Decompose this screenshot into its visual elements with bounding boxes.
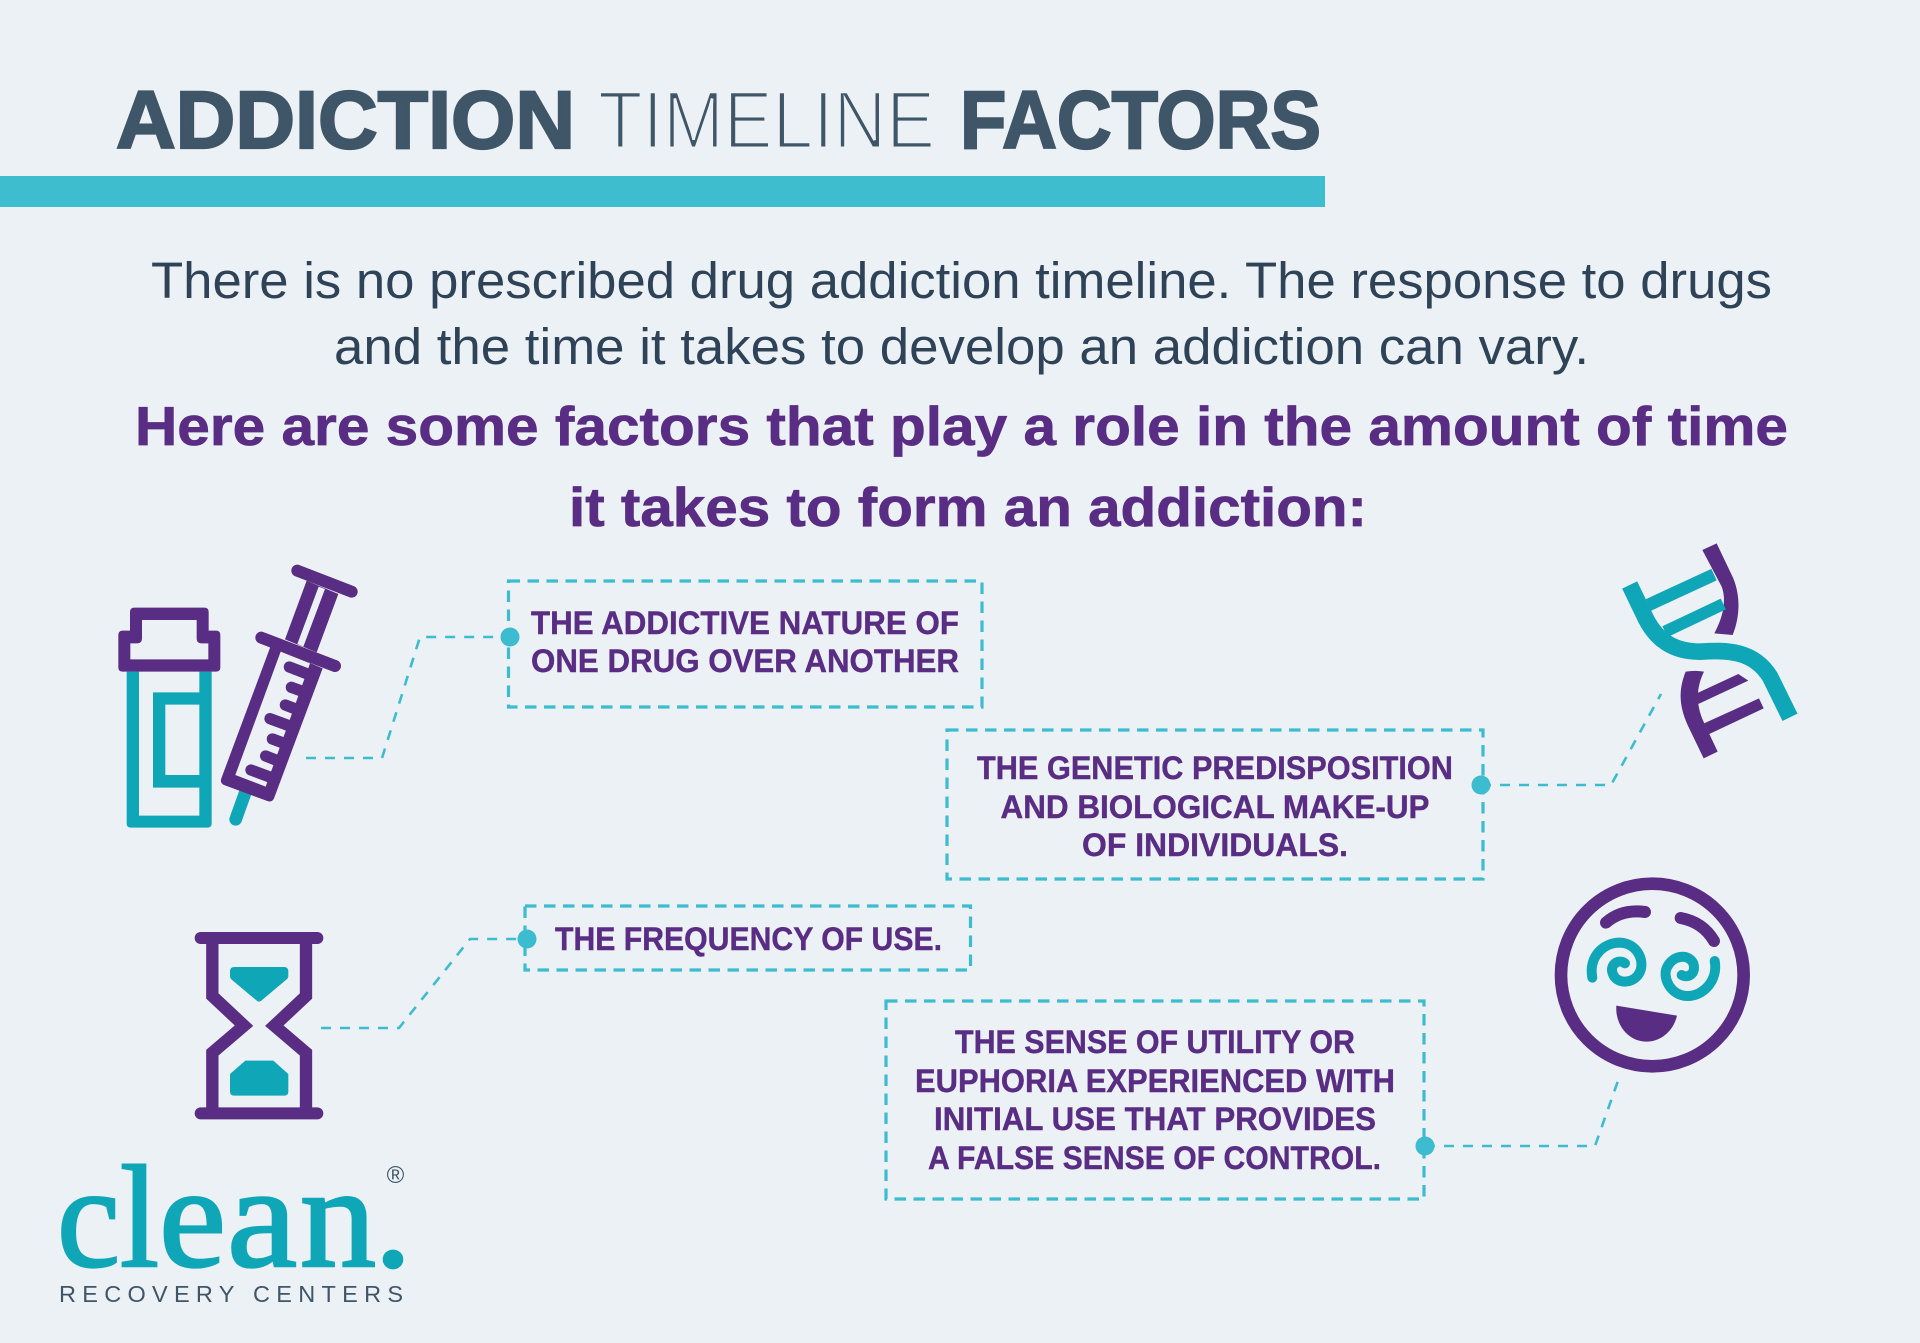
logo — [57, 1136, 412, 1307]
box: sense of utility: A FALSE SENSE OF CONTROL. — [928, 1140, 1381, 1176]
connector: frequency — [321, 939, 527, 1028]
box: frequency of use — [518, 906, 970, 970]
logo: . — [374, 1136, 412, 1298]
title — [116, 75, 1321, 166]
title: ADDICTION — [116, 75, 575, 166]
logo: RECOVERY CENTERS — [59, 1281, 403, 1307]
icon: dna helix — [1630, 543, 1790, 758]
box: genetic predisposition: THE GENETIC PREDISPOSITION — [977, 750, 1453, 786]
connector: drug — [306, 637, 510, 758]
box: sense of utility: THE SENSE OF UTILITY OR — [955, 1024, 1355, 1060]
title underline bar — [0, 176, 1325, 207]
box: addictive nature — [500, 581, 982, 707]
box: addictive nature: THE ADDICTIVE NATURE OF — [531, 605, 959, 641]
icon: syringe — [221, 571, 352, 819]
intro text: and the time it takes to develop an addiction can vary. — [334, 318, 1589, 375]
title: FACTORS — [960, 75, 1321, 166]
box: addictive nature: ONE DRUG OVER ANOTHER — [531, 643, 959, 679]
intro text — [151, 252, 1772, 375]
logo: a — [227, 1136, 297, 1298]
icon: pill bottle — [118, 608, 220, 828]
logo: n — [300, 1136, 376, 1298]
box: sense of utility: EUPHORIA EXPERIENCED WITH — [915, 1063, 1395, 1099]
logo: e — [159, 1136, 226, 1298]
logo: l — [120, 1136, 159, 1298]
title: TIMELINE — [598, 75, 935, 166]
intro text: There is no prescribed drug addiction timeline. The response to drugs — [151, 252, 1772, 309]
subheading — [135, 396, 1788, 538]
icon: hourglass — [201, 938, 317, 1113]
box: sense of utility: INITIAL USE THAT PROVIDES — [934, 1101, 1376, 1137]
box: genetic predisposition — [947, 730, 1490, 879]
connector: euphoria — [1425, 1078, 1619, 1146]
connector: genetics — [1481, 694, 1661, 785]
box: genetic predisposition: OF INDIVIDUALS. — [1082, 827, 1348, 863]
box: sense of utility — [886, 1001, 1434, 1199]
box: genetic predisposition: AND BIOLOGICAL MAKE-UP — [1000, 789, 1430, 825]
icon: dizzy face — [1561, 884, 1744, 1066]
subheading: Here are some factors that play a role in the amount of time — [135, 396, 1788, 457]
logo: c — [57, 1136, 120, 1298]
box: frequency of use: THE FREQUENCY OF USE. — [555, 921, 942, 957]
logo: ® — [387, 1162, 405, 1189]
subheading: it takes to form an addiction: — [569, 477, 1367, 538]
